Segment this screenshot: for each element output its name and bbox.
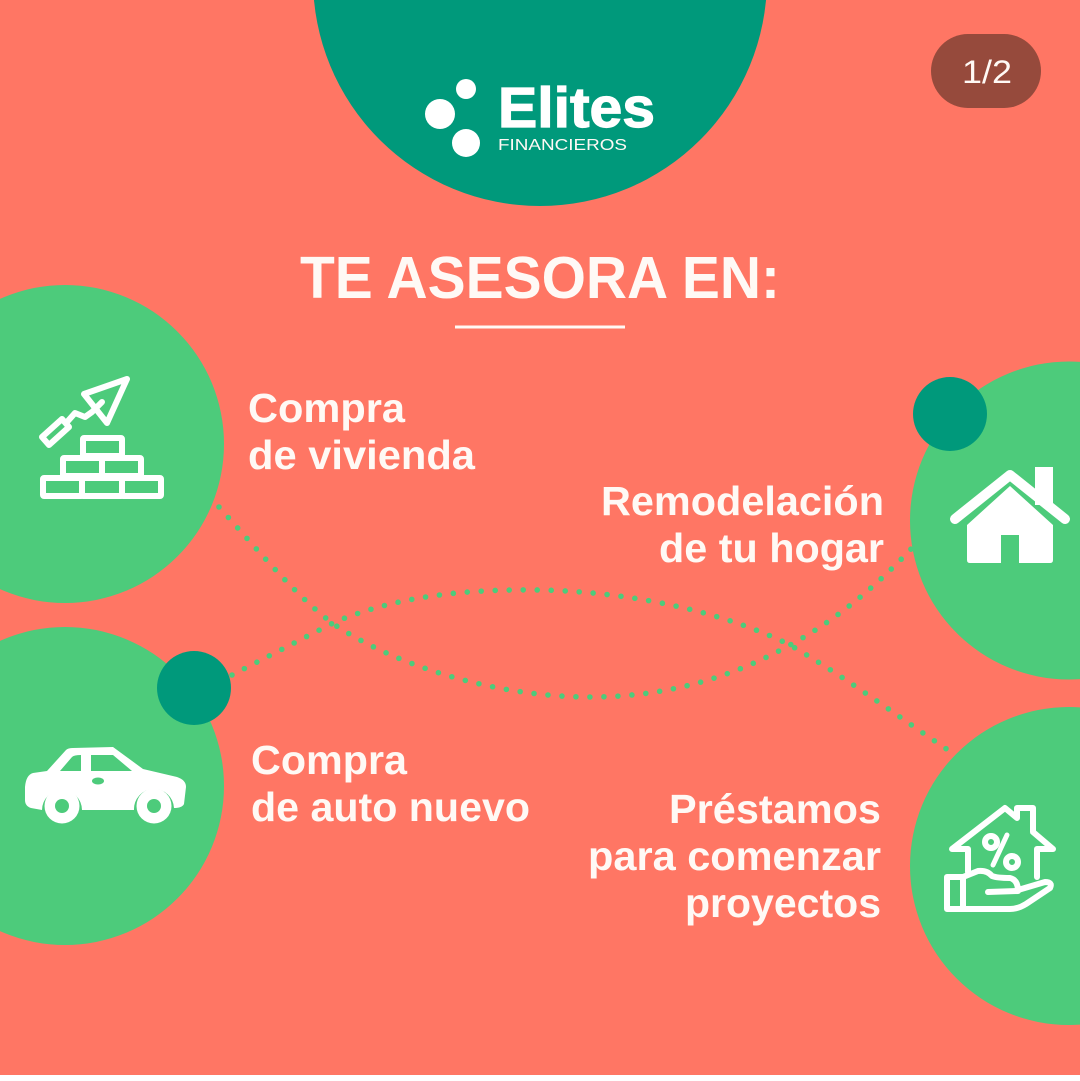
accent dot: car panel [157,651,231,725]
panel: compra de vivienda [0,285,224,603]
label: compra de vivienda [248,385,476,478]
label: compra de auto nuevo [251,737,530,830]
label: prestamos para comenzar proyectos: Préstamos [669,786,881,832]
label: remodelacion de tu hogar [601,478,884,571]
icon: house [955,467,1065,563]
logo panel [313,0,767,206]
label: compra de auto nuevo: Compra [251,737,408,783]
label: compra de vivienda: Compra [248,385,406,431]
dotted connector: top left to right [219,507,912,697]
panel: prestamos [910,707,1080,1025]
panel: remodelacion [910,362,1080,680]
panel: compra de auto [0,627,224,945]
title: TE ASESORA EN: [300,245,780,311]
page badge: 1/2 [962,54,1012,90]
icon: house with percent on hand [947,808,1053,909]
label: prestamos para comenzar proyectos: proyectos [685,880,881,926]
icon: car [25,747,186,824]
label: prestamos para comenzar proyectos [588,786,881,926]
page badge [931,34,1041,108]
label: compra de vivienda: de vivienda [248,432,476,478]
dotted connector: bottom left to right [232,590,948,750]
label: remodelacion de tu hogar: de tu hogar [659,525,884,571]
logo mark [425,79,480,157]
icon: trowel and bricks [42,379,161,496]
label: remodelacion de tu hogar: Remodelación [601,478,884,524]
accent dot: house panel [913,377,987,451]
logo wordmark: Elites [498,76,655,140]
label: compra de auto nuevo: de auto nuevo [251,784,530,830]
logo subtitle: FINANCIEROS [498,137,627,154]
label: prestamos para comenzar proyectos: para comenzar [588,833,881,879]
